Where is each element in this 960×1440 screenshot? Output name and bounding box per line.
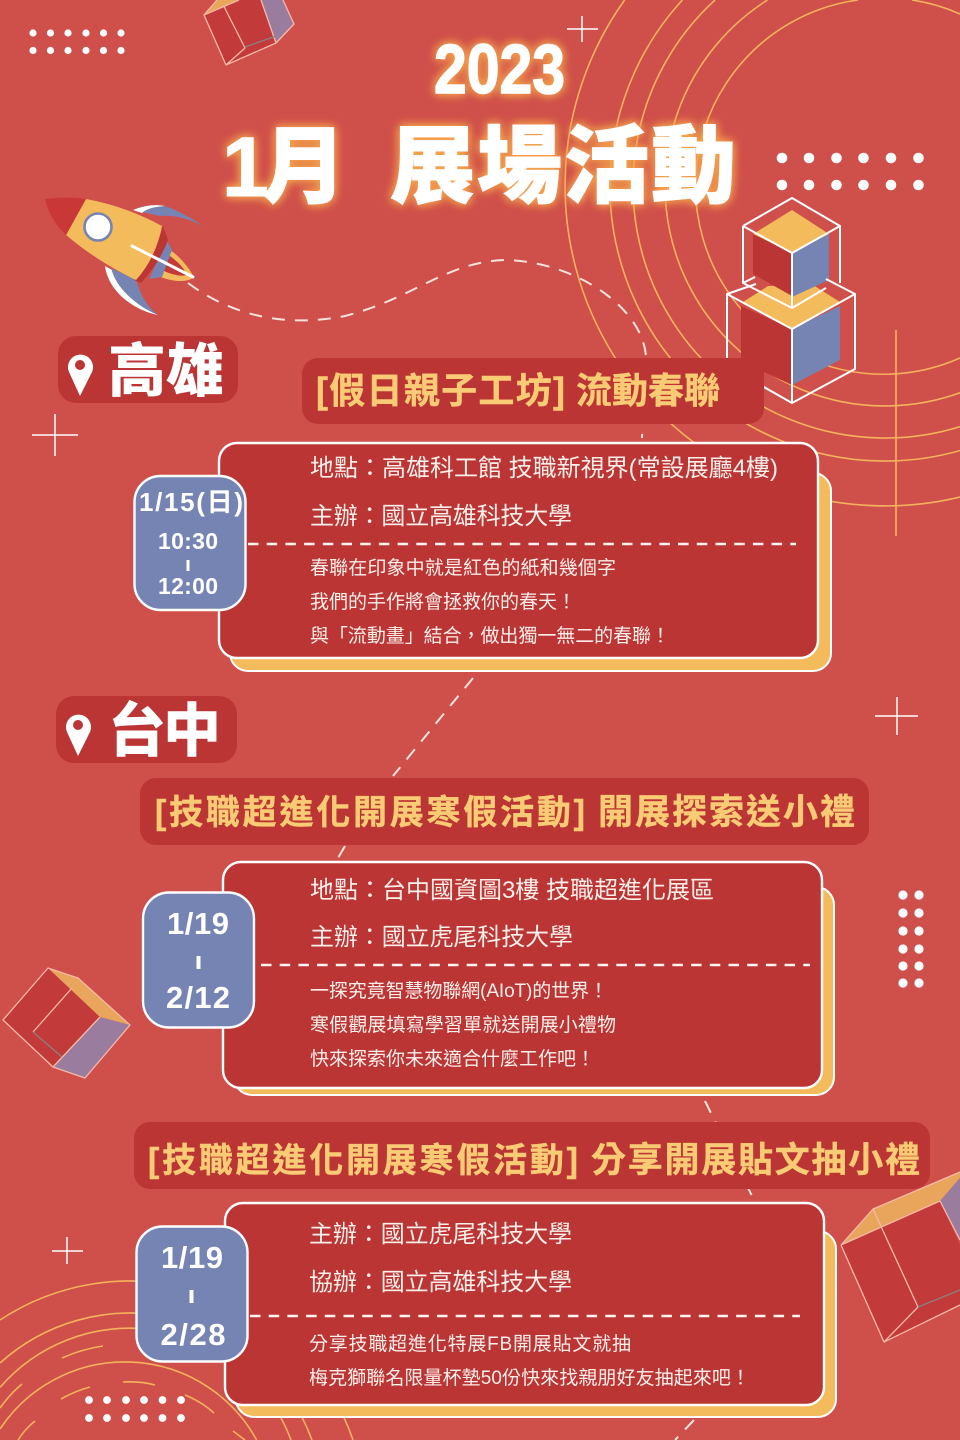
concentric rings: bottom left: [0, 1281, 353, 1440]
dot grid: top left: [29, 29, 125, 54]
date badge: [134, 476, 246, 610]
date badge: [136, 1226, 248, 1362]
event banner: 流動春聯: [302, 358, 764, 424]
text: description: 春聯在印象中就是紅色的紙和幾個字: [310, 557, 616, 579]
text: venue: 地點：台中國資圖3樓 技職超進化展區: [310, 877, 714, 904]
text: description: 梅克獅聯名限量杯墊50份快來找親朋好友抽起來吧！: [309, 1367, 750, 1389]
title: year: 2023: [434, 30, 565, 108]
date badge: 12:00: [158, 573, 218, 599]
event banner: 開展探索送小禮: 開展探索送小禮: [598, 793, 855, 832]
title: main heading: 1: [222, 120, 269, 214]
location label: 台中: [56, 696, 237, 764]
location label: 台中: 台中: [108, 699, 221, 764]
event banner: 流動春聯: 流動春聯: [576, 370, 720, 411]
dot grid: top right: [777, 153, 924, 190]
title: main heading: 月: [262, 120, 346, 214]
event banner: 開展探索送小禮: [技職超進化開展寒假活動]: [155, 794, 585, 832]
text: description: 我們的手作將會拯救你的春天！: [310, 591, 576, 613]
icon: map pin: [66, 715, 91, 756]
icon: wire cube left: [3, 968, 130, 1078]
text: description: 一探究竟智慧物聯網(AIoT)的世界！: [310, 980, 608, 1002]
text: organizer: 主辦：國立高雄科技大學: [310, 503, 572, 530]
card: 高雄 event: [134, 443, 831, 671]
date badge: 2/28: [160, 1317, 226, 1352]
date badge: 2/12: [166, 980, 230, 1015]
event banner: 分享開展貼文抽小禮: 分享開展貼文抽小禮: [591, 1141, 920, 1180]
text: co-organizer: 協辦：國立高雄科技大學: [309, 1269, 572, 1296]
text: description: 分享技職超進化特展FB開展貼文就抽: [309, 1333, 631, 1355]
icon: wire cube bottom right: [841, 1172, 960, 1342]
icon: rocket: [45, 198, 203, 315]
location label: 高雄: 高雄: [108, 339, 224, 404]
title: main heading: [222, 120, 736, 215]
text: description: [310, 980, 616, 1070]
card: 台中 event: [143, 862, 834, 1095]
event banner: 分享開展貼文抽小禮: [134, 1122, 930, 1189]
event banner: 流動春聯: [假日親子工坊]: [316, 370, 565, 411]
concentric rings: top right: [565, 0, 960, 536]
date badge: 1/15(日): [139, 487, 243, 517]
dashed rocket trail: [188, 260, 752, 1440]
date badge: [143, 892, 254, 1028]
date badge: 10:30: [158, 528, 218, 554]
date badge: 1/19: [167, 906, 229, 941]
text: organizer: 主辦：國立虎尾科技大學: [310, 924, 573, 951]
dot grid: right middle: [898, 890, 924, 988]
date badge: 1/19: [161, 1240, 223, 1275]
card: 分享 event: [136, 1203, 836, 1417]
title: main heading: 展場活動: [390, 120, 736, 215]
dot grid: bottom left: [85, 1396, 185, 1422]
icon: stacked cubes: [727, 198, 855, 403]
plus marks: [32, 16, 918, 1264]
text: venue: 地點：高雄科工館 技職新視界(常設展廳4樓): [310, 455, 778, 482]
text: description: 與「流動畫」結合，做出獨一無二的春聯！: [310, 625, 670, 647]
text: description: 快來探索你未來適合什麼工作吧！: [310, 1048, 595, 1070]
text: description: [310, 557, 670, 647]
event banner: 分享開展貼文抽小禮: [技職超進化開展寒假活動]: [148, 1142, 578, 1180]
icon: wire cube top left: [204, 0, 294, 65]
location label: 高雄: [58, 336, 238, 404]
icon: map pin: [68, 355, 93, 396]
event banner: 開展探索送小禮: [140, 778, 869, 845]
text: description: 寒假觀展填寫學習單就送開展小禮物: [310, 1014, 616, 1036]
text: description: [309, 1333, 750, 1389]
text: organizer: 主辦：國立虎尾科技大學: [309, 1221, 572, 1248]
